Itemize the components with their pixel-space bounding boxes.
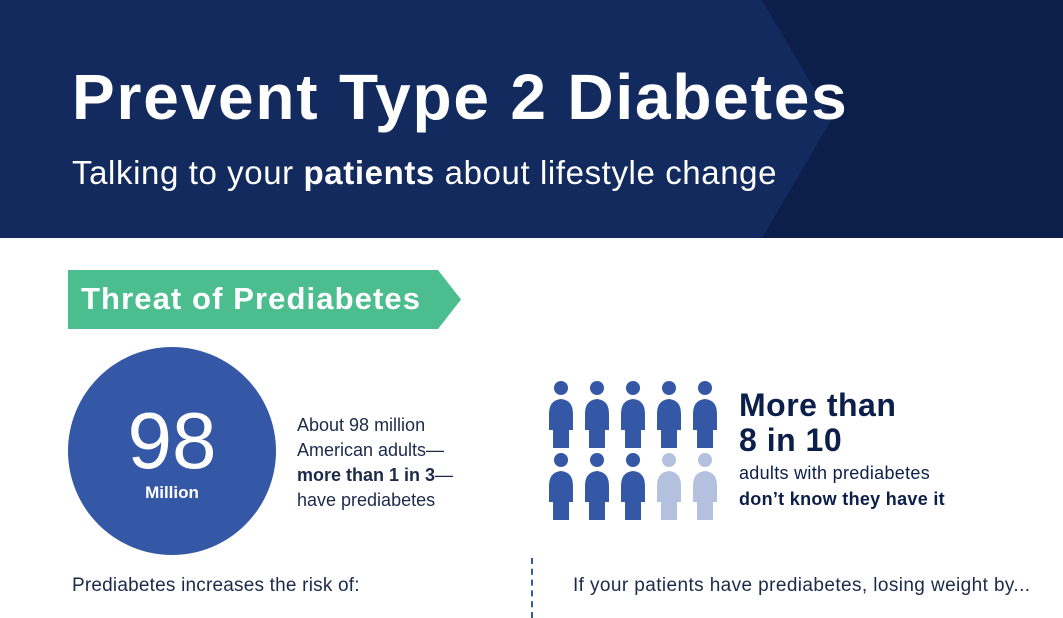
text: 8 in 10 stat [739, 387, 945, 509]
subtitle: Talking to your patients about lifestyle change [72, 154, 777, 191]
section heading: Threat of Prediabetes [68, 270, 461, 329]
text: 98 million description: About 98 million [297, 415, 425, 435]
text: 8 in 10 stat: don’t know they have it [739, 489, 945, 509]
text: 8 in 10 stat: adults with prediabetes [739, 463, 930, 483]
text: 98 million description: American adults— [297, 440, 444, 460]
text: 98 million description: more than 1 in 3— [297, 465, 453, 485]
title: Prevent Type 2 Diabetes [72, 61, 849, 133]
section heading: Threat of Prediabetes: Threat of Prediabetes [81, 281, 421, 316]
text: weight loss intro: If your patients have prediabetes, losing weight by... [573, 575, 1030, 596]
text: risk intro: Prediabetes increases the risk of: [72, 575, 360, 596]
text: 98 million description: have prediabetes [297, 490, 435, 510]
dashed divider [531, 558, 533, 618]
text: 8 in 10 stat: More than [739, 387, 896, 423]
text: 8 in 10 stat: 8 in 10 [739, 422, 842, 458]
stat circle: 98 million: 98 [128, 396, 216, 485]
stat circle: 98 million [68, 347, 276, 555]
stat circle: 98 million: Million [145, 483, 199, 502]
header banner [0, 0, 1063, 238]
text: 98 million description [297, 415, 453, 510]
icon grid: people 8 in 10 [549, 381, 717, 520]
